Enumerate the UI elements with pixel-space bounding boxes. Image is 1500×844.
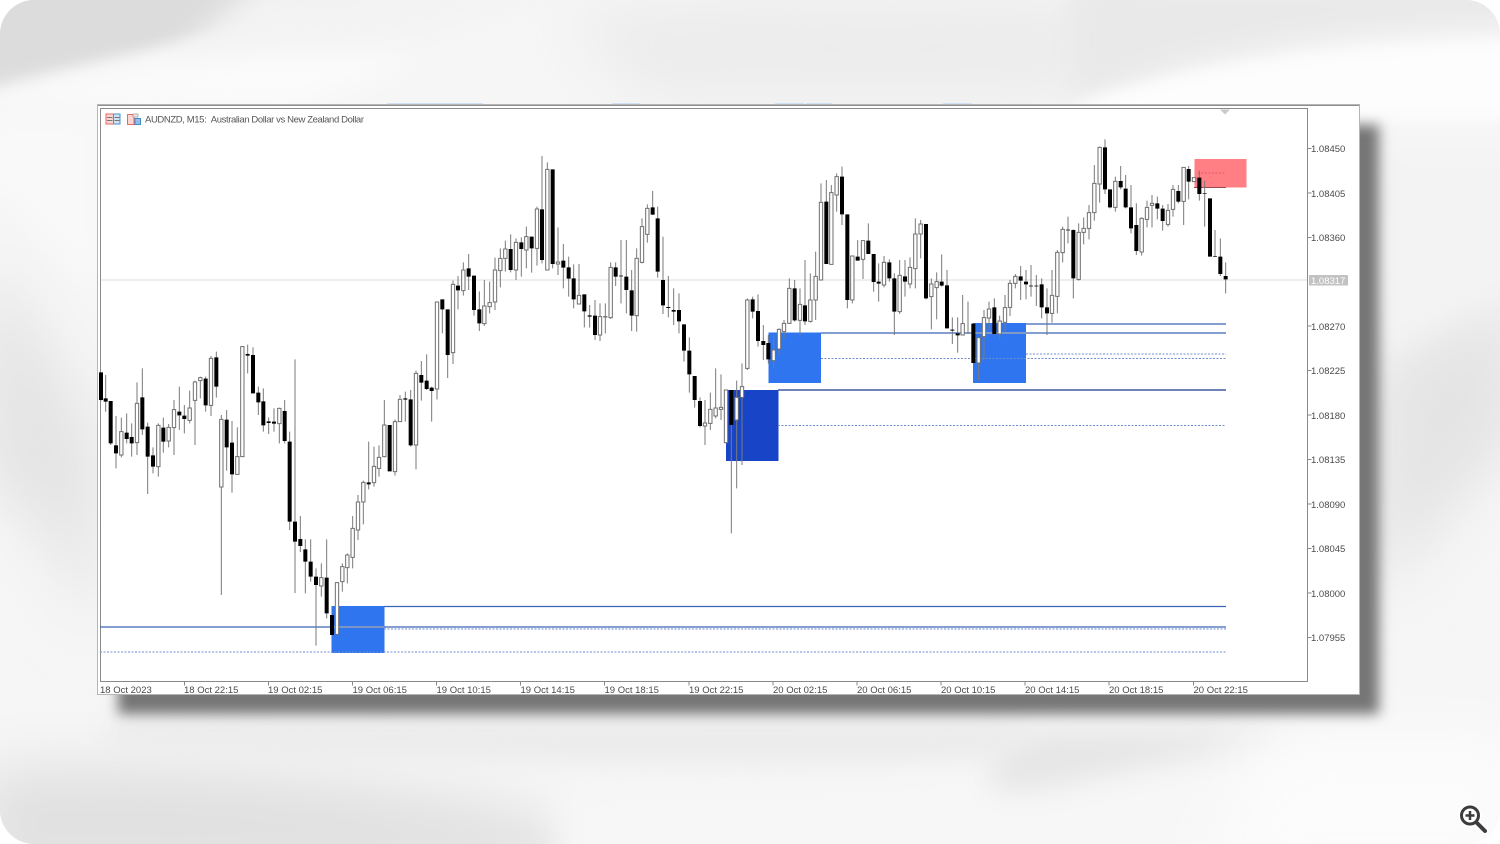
candles 20 Oct morning xyxy=(882,218,1059,381)
current price tag: 1.08317 xyxy=(1311,276,1345,287)
horizontal levels xyxy=(100,173,1226,652)
time axis: 20 Oct 06:15 xyxy=(857,685,911,696)
scroll marker xyxy=(1220,110,1230,114)
current price line xyxy=(101,279,1307,281)
time axis: 19 Oct 10:15 xyxy=(436,685,491,696)
left fold xyxy=(0,250,98,640)
price axis: 1.08225 xyxy=(1311,366,1345,377)
bottom left shade xyxy=(0,766,640,844)
price axis: 1.07955 xyxy=(1311,633,1345,644)
time axis: 19 Oct 14:15 xyxy=(520,685,575,696)
price axis: 1.08135 xyxy=(1311,455,1345,466)
bottom centre highlight xyxy=(560,760,1300,844)
demand zone 4 xyxy=(973,323,1026,383)
icon: chart list xyxy=(106,114,120,124)
time axis: 20 Oct 10:15 xyxy=(941,685,995,696)
top-left fold xyxy=(0,0,450,92)
right fold xyxy=(1375,285,1500,600)
price axis: 1.08180 xyxy=(1311,411,1345,422)
time axis: 19 Oct 22:15 xyxy=(689,685,743,696)
time axis: 20 Oct 02:15 xyxy=(773,685,827,696)
time axis: 20 Oct 18:15 xyxy=(1109,685,1163,696)
candles 19 Oct morning rally xyxy=(362,302,439,524)
icon: zoom magnifier xyxy=(1460,806,1485,831)
top-right fold xyxy=(1070,0,1500,104)
time axis: 19 Oct 06:15 xyxy=(352,685,407,696)
candles at the 19 Oct low xyxy=(305,495,360,646)
price axis: 1.08000 xyxy=(1311,589,1345,600)
price axis: 1.08360 xyxy=(1311,233,1345,244)
demand zone 2 dark xyxy=(726,390,778,461)
candles at the dark demand zone xyxy=(689,337,744,533)
chart window xyxy=(98,105,1359,694)
time axis xyxy=(100,682,1248,696)
price axis: 1.08090 xyxy=(1311,500,1345,511)
time axis: 19 Oct 02:15 xyxy=(268,685,322,696)
time axis: 18 Oct 2023 xyxy=(100,685,152,696)
demand zone 1 xyxy=(332,606,384,653)
bottom right fold xyxy=(987,730,1300,792)
top frame line xyxy=(98,106,1359,682)
chart title: AUDNZD, M15: Australian Dollar vs New Zealand Dollar xyxy=(145,114,364,126)
candles 19 Oct midday peak xyxy=(442,156,638,378)
price axis: 1.08405 xyxy=(1311,189,1345,200)
faint toolbar marks xyxy=(387,102,972,104)
price axis: 1.08270 xyxy=(1311,322,1345,333)
candles 18 Oct to 19 Oct 02:15 xyxy=(101,345,300,595)
icon: trading xyxy=(128,114,140,124)
price axis xyxy=(1308,144,1345,644)
demand zone 3 xyxy=(768,332,821,383)
price axis: 1.08045 xyxy=(1311,544,1345,555)
top centre shade xyxy=(560,0,1180,100)
candles 19 Oct afternoon xyxy=(640,167,879,370)
time axis: 20 Oct 14:15 xyxy=(1025,685,1079,696)
time axis: 20 Oct 22:15 xyxy=(1194,685,1248,696)
time axis: 18 Oct 22:15 xyxy=(184,685,238,696)
candles 20 Oct afternoon and last bars xyxy=(1061,139,1226,298)
time axis: 19 Oct 18:15 xyxy=(604,685,659,696)
price axis: 1.08450 xyxy=(1311,144,1345,155)
supply zone red xyxy=(1194,159,1246,188)
